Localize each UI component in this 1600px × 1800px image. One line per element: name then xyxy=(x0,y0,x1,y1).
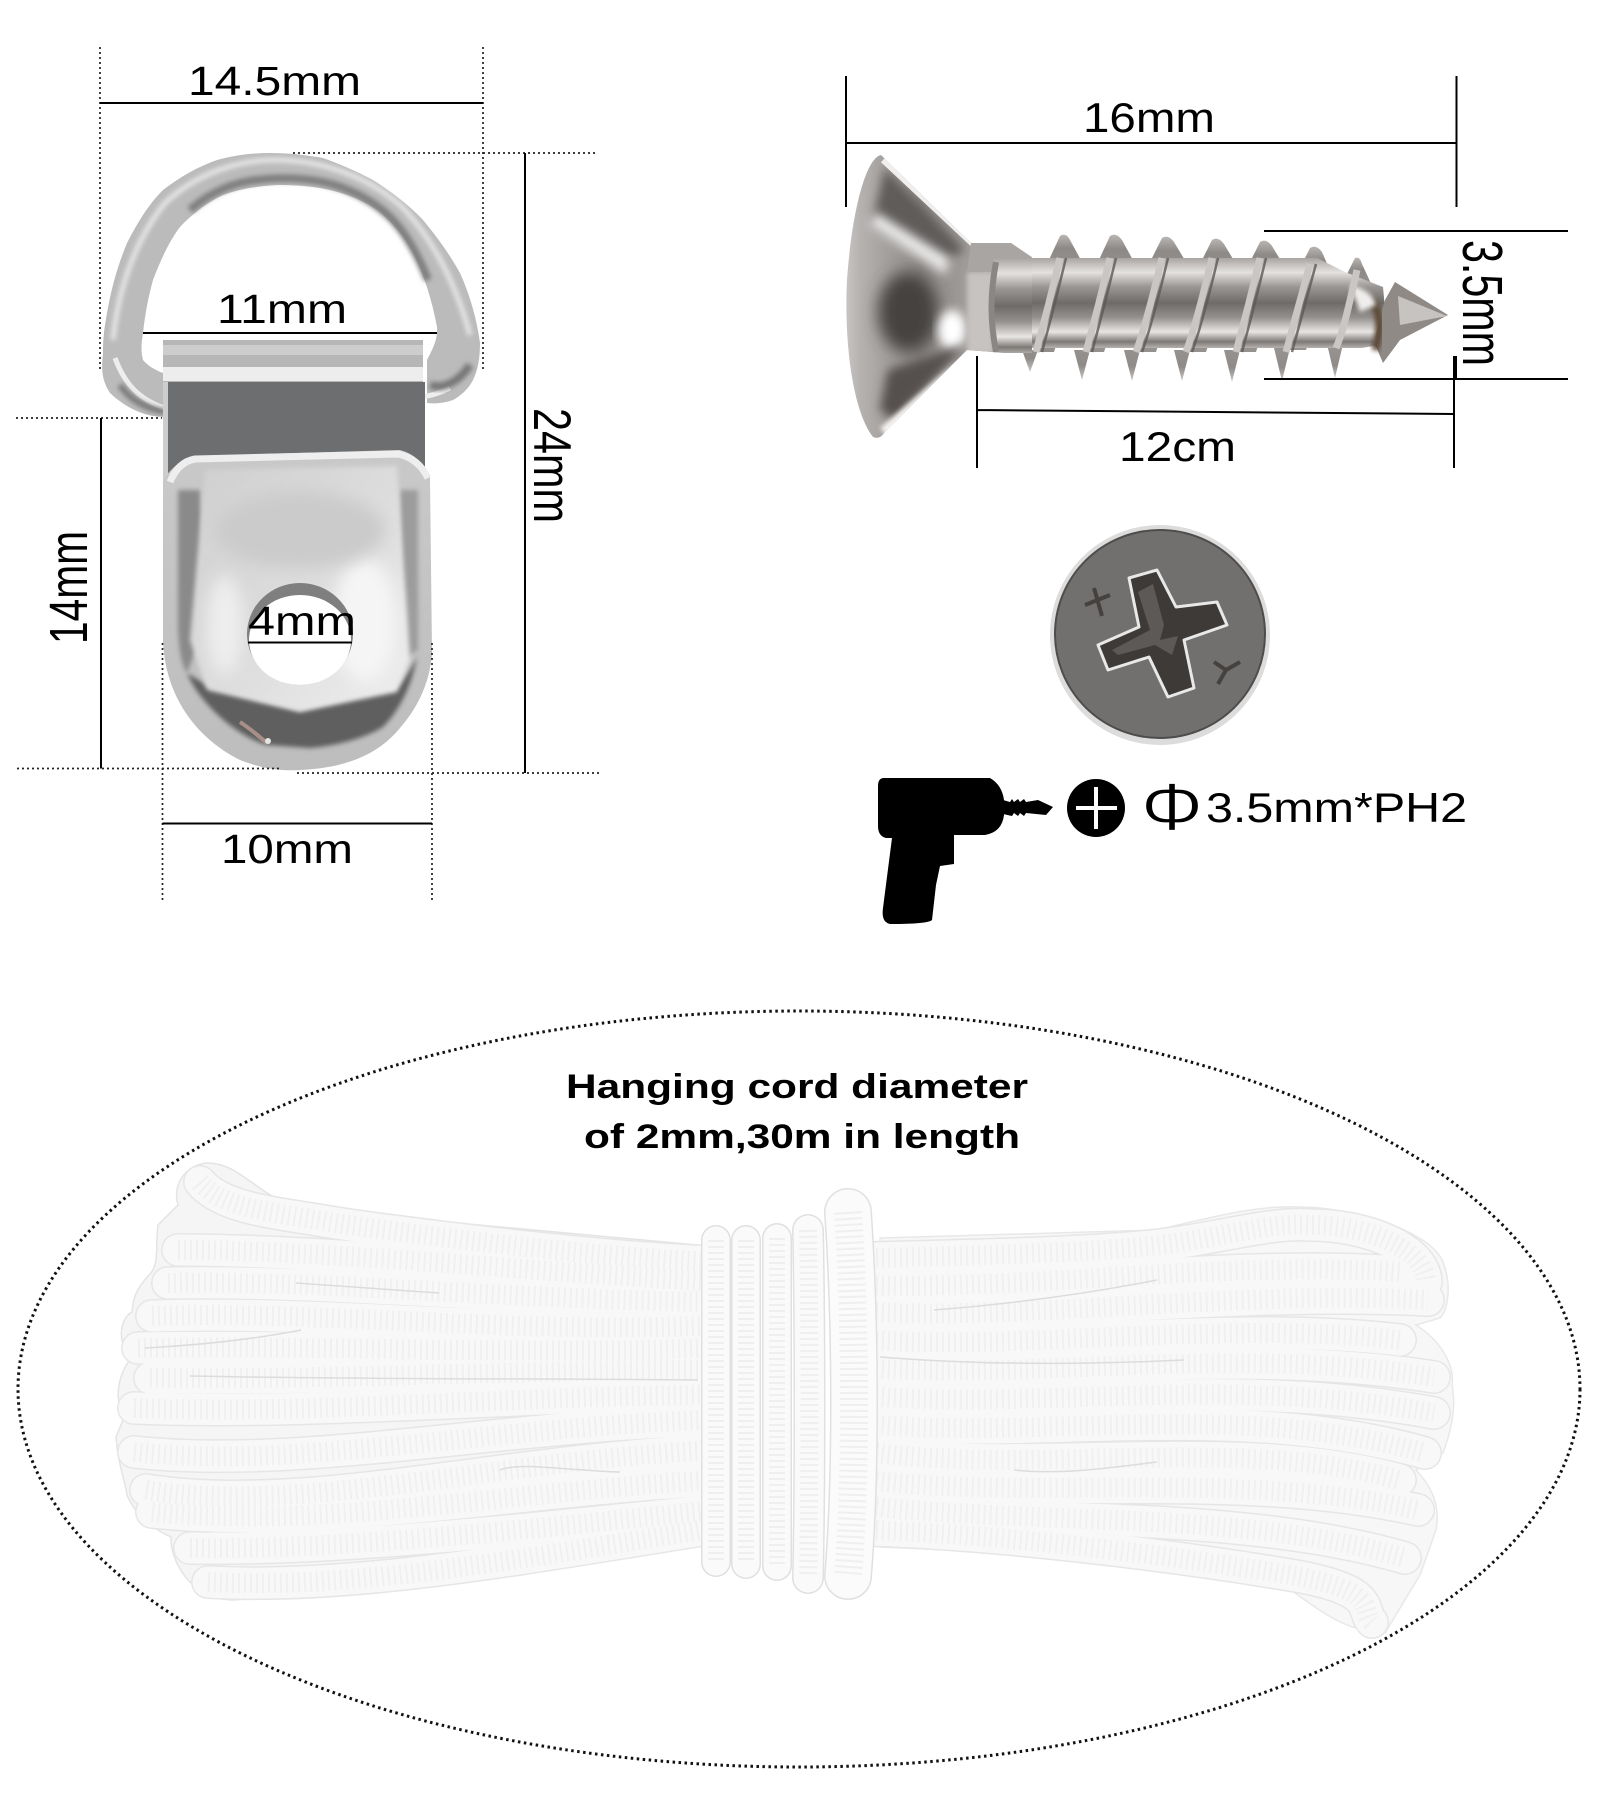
dotted ellipse outline xyxy=(18,1011,1580,1767)
icon: electric drill xyxy=(878,778,1053,924)
photo: coil of white cord xyxy=(116,1163,1454,1633)
icon: Phillips symbol xyxy=(1067,779,1125,837)
label: 10mm: 10mm xyxy=(221,826,353,872)
panel: hanging cord xyxy=(18,1011,1580,1767)
label: diameter and bit size xyxy=(1141,769,1467,845)
cord caption xyxy=(566,1068,1028,1156)
label: 4mm: 4mm xyxy=(248,598,356,644)
dimension lines: D-ring xyxy=(16,47,599,901)
photo: screw head top view xyxy=(1050,525,1270,745)
dimension lines: screw xyxy=(846,76,1568,468)
label: 12cm: 12cm xyxy=(1119,423,1236,470)
panel: D-ring hanger with dimensions xyxy=(16,47,599,901)
photo: screw side view xyxy=(840,150,1448,445)
label: 11mm: 11mm xyxy=(217,286,347,332)
label: 14mm: 14mm xyxy=(39,531,99,644)
caption line 2: of 2mm,30m in length xyxy=(584,1118,1020,1156)
caption line 1: Hanging cord diameter xyxy=(566,1068,1028,1106)
label: 14.5mm: 14.5mm xyxy=(188,58,361,104)
label: 24mm: 24mm xyxy=(522,408,581,523)
panel: screw with dimensions xyxy=(840,76,1568,470)
label: 3.5mm: 3.5mm xyxy=(1450,240,1514,366)
photo: D-ring hanger xyxy=(102,153,480,770)
label: 16mm: 16mm xyxy=(1083,94,1215,141)
bit size text: 3.5mm*PH2 xyxy=(1206,784,1467,831)
diameter symbol: Φ xyxy=(1141,769,1203,845)
